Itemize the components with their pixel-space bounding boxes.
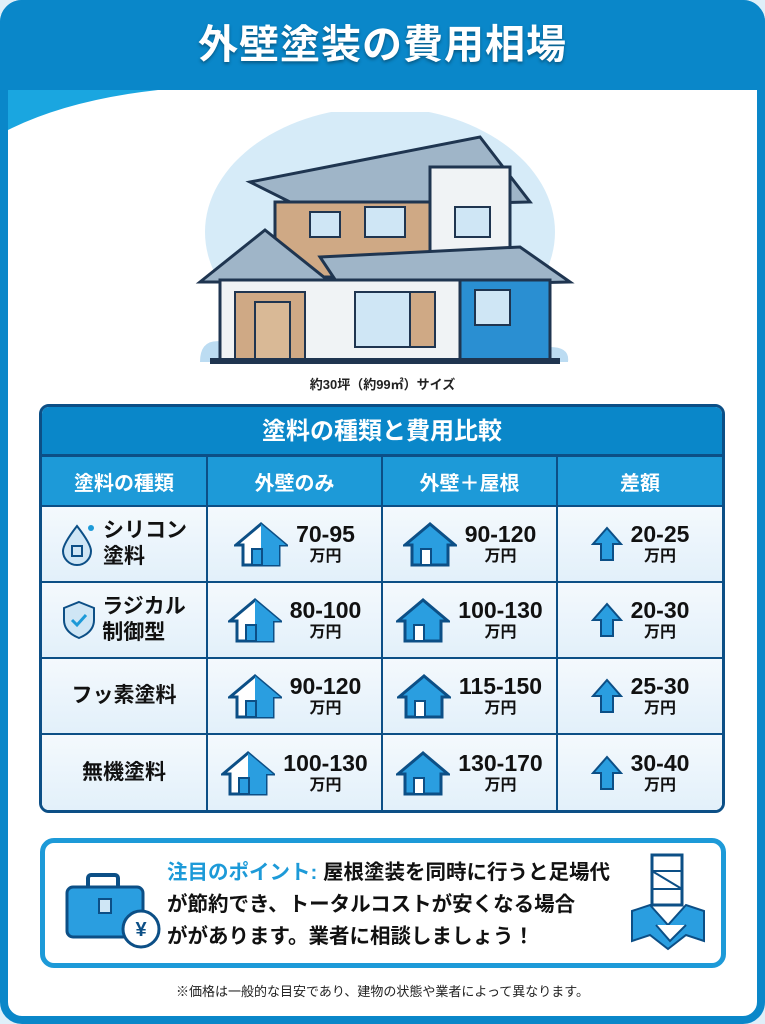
row: fluorine (42, 659, 722, 735)
point text: が節約でき、トータルコストが安くなる場合 (167, 893, 575, 916)
row: inorganic: 万円 (309, 777, 342, 794)
header row (42, 457, 722, 507)
footnote: ※価格は一般的な目安であり、建物の状態や業者によって異なります。 (176, 984, 589, 999)
row: inorganic: 無機塗料 (82, 761, 166, 784)
row: silicone (42, 507, 722, 583)
row: fluorine: 万円 (484, 700, 516, 717)
header row: 塗料の種類 (74, 472, 174, 494)
row: silicone: 万円 (309, 548, 342, 565)
point text (167, 861, 610, 948)
title (0, 0, 765, 90)
row: radical: 100-130 (458, 597, 543, 623)
header row: 外壁＋屋根 (420, 472, 520, 494)
row: fluorine: 90-120 (290, 673, 361, 699)
row: silicone: 万円 (484, 548, 516, 565)
header row: 差額 (620, 472, 660, 494)
title: 外壁塗装の費用相場 (198, 23, 567, 67)
row: fluorine: フッ素塗料 (72, 684, 176, 707)
icon: toolbox with yen: ¥ (135, 919, 147, 941)
row: inorganic (42, 735, 722, 811)
table title (42, 407, 722, 457)
row: radical: 80-100 (290, 597, 361, 623)
decorative wave left (8, 90, 158, 130)
row: silicone: 塗料 (103, 545, 145, 568)
row: radical: 万円 (309, 624, 342, 641)
row: silicone: 70-95 (296, 521, 355, 547)
point text: ががあります。業者に相談しましょう！ (167, 925, 534, 948)
row: silicone: 20-25 (631, 521, 689, 547)
caption: 約30坪（約99㎡）サイズ (310, 377, 455, 392)
row: inorganic: 100-130 (283, 750, 368, 776)
row: radical: 20-30 (631, 597, 689, 623)
point text: 注目のポイント: 屋根塗装を同時に行うと足場代 (167, 861, 610, 884)
icon: scaffold and handshake (631, 854, 705, 950)
row: silicone: 万円 (644, 548, 676, 565)
header row: 外壁のみ (254, 472, 334, 494)
row: radical: 万円 (644, 624, 676, 641)
row: fluorine: 25-30 (631, 673, 689, 699)
row: radical: 制御型 (102, 621, 165, 644)
row: radical (42, 583, 722, 659)
row: silicone: 90-120 (465, 521, 536, 547)
panel: point callout (40, 838, 726, 968)
row: inorganic: 30-40 (631, 750, 689, 776)
row: inorganic: 万円 (644, 777, 676, 794)
row: radical: ラジカル (102, 595, 186, 618)
row: silicone: シリコン (103, 519, 187, 542)
row: radical: 万円 (484, 624, 516, 641)
row: fluorine: 万円 (644, 700, 676, 717)
icon: toolbox with yen (66, 873, 160, 948)
row: fluorine: 115-150 (459, 673, 542, 699)
house illustration (196, 112, 574, 364)
row: inorganic: 130-170 (458, 750, 543, 776)
row: fluorine: 万円 (309, 700, 342, 717)
row: inorganic: 万円 (484, 777, 516, 794)
table: cost comparison (39, 404, 725, 813)
table title: 塗料の種類と費用比較 (262, 418, 502, 445)
